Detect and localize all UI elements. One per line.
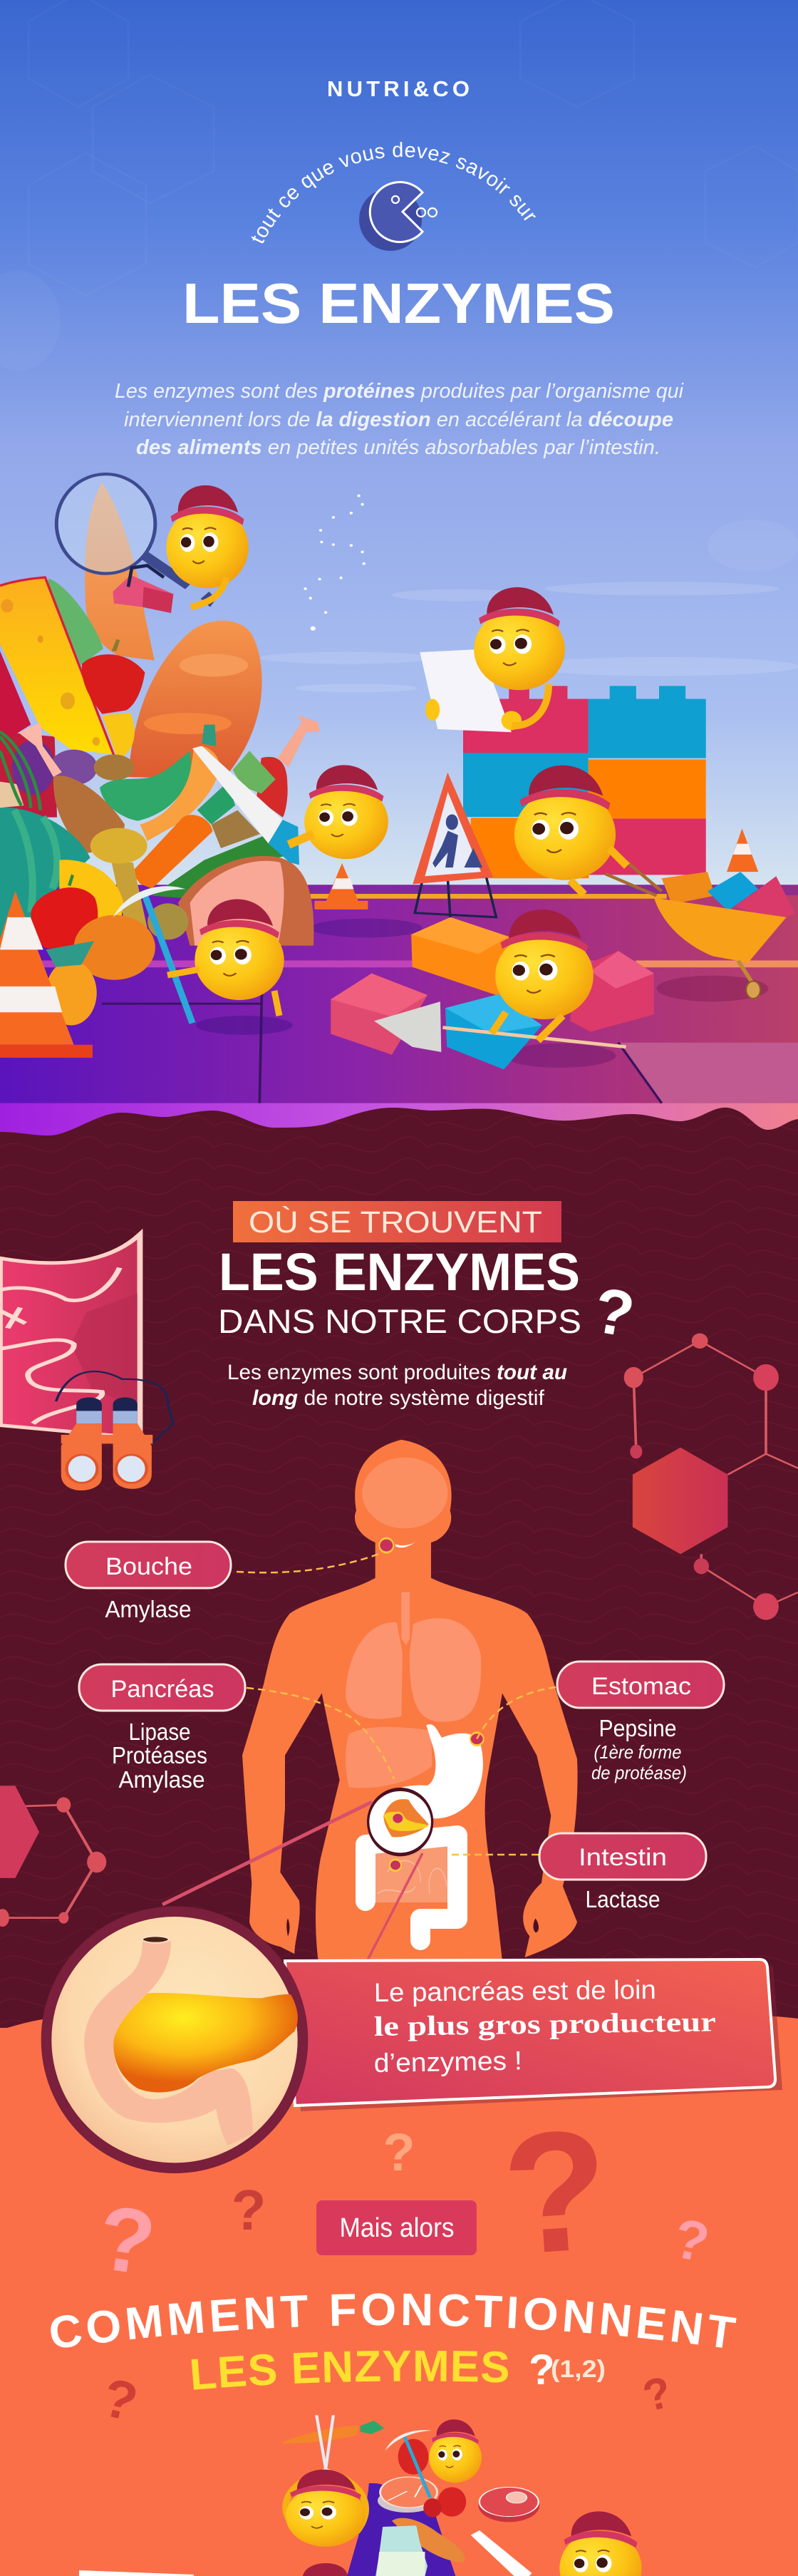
question mark: pink right: ? [668,2206,715,2274]
heading: comment fonctionnent: COMMENT FONCTIONNENT [51,2293,737,2348]
raised arms [286,2475,366,2533]
banner: où se trouvent [233,1201,561,1242]
title: Les enzymes: LES ENZYMES [182,272,615,335]
character: wheelbarrow pusher [514,766,627,895]
intro paragraph [115,380,685,459]
small intestine [373,1844,449,1902]
section paragraph [227,1361,567,1410]
molecule: left [0,1786,106,1927]
shovel [374,1001,626,1052]
character: knife holder [559,2511,642,2576]
wheelbarrow [606,861,795,999]
binoculars [56,1371,173,1490]
icon: pacman enzyme [359,182,437,251]
cutting board [347,2483,455,2576]
traffic cone: left [0,891,93,1058]
character: scissors holder [286,2470,366,2547]
label: intestin: Intestin [579,1844,667,1871]
green vegetable [152,834,287,898]
milk bottle [375,2525,428,2576]
label: pancréas: Pancréas [111,1676,214,1703]
label: estomac [557,1661,724,1783]
character: inspector with magnifier [166,485,249,607]
scissors [306,2415,346,2480]
hands detail [286,1918,539,1936]
magnifier handle and toolbox [113,551,299,865]
background: sky [0,0,798,898]
label: intestin: Lactase [586,1886,660,1912]
label: bouche: Amylase [105,1596,191,1622]
label: estomac: Pepsine [598,1715,677,1741]
yellow pepper [102,713,135,758]
logo: Nutri&Co: NUTRI&CO [327,76,470,101]
zoom lens: pancreas [46,1912,303,2168]
human body with organs [242,1440,578,1961]
section paragraph: long de notre système digestif [252,1386,545,1410]
baguette [85,483,155,661]
character: with shovel [492,910,594,1041]
lemon [59,860,123,936]
label: pancréas: Amylase [118,1766,205,1793]
filler behind leeks [0,732,57,818]
heading: dans notre corps: DANS NOTRE CORPS [218,1302,581,1340]
traffic cone: centre [314,863,368,910]
leeks [0,732,41,810]
red pepper behind [398,2439,428,2475]
heading: les enzymes yellow: LES ENZYMES [191,2351,508,2390]
callout: pancreas: le plus gros producteur [374,2006,716,2042]
chicken leg [233,715,319,818]
pickaxe [113,886,192,1023]
road sign [415,777,496,919]
heading: les enzymes yellow: (1,2) [551,2356,606,2383]
label: bouche [66,1542,231,1622]
squash and stem [140,725,260,848]
ham [178,856,314,946]
hat peek [303,2563,348,2576]
molecule: right [624,1334,798,1620]
knife [471,2530,532,2576]
label: bouche: Bouche [105,1553,192,1580]
illustration: sky details, ground and brick wall [0,495,798,1142]
carrot [132,815,212,889]
steak [478,2487,539,2522]
heading question mark: ? [589,1274,639,1351]
dashed connector lines [237,1554,556,1855]
intro paragraph: des aliments en petites unités absorbables par l’intestin. [136,436,660,459]
label: pancréas: Lipase [128,1719,191,1745]
sparkle dots [304,495,366,631]
road map sheet [420,649,522,732]
saw [192,746,299,865]
body silhouette [242,1440,578,1961]
label: estomac: Estomac [591,1673,691,1700]
heading: les enzymes: LES ENZYMES [219,1242,580,1302]
question mark: dark: ? [232,2178,266,2242]
intro paragraph: Les enzymes sont des protéines produites par l’organisme qui [115,380,685,403]
question mark: dark lower left: ? [97,2367,143,2433]
clouds [259,520,798,692]
stomach [378,1724,483,1818]
enzyme site markers [379,1538,484,1871]
baguette [392,2518,465,2562]
illustration: foreground props [0,474,795,1069]
big potato [53,776,125,853]
character: pickaxe holder [429,2419,482,2483]
label: estomac: (1ère forme [594,1741,681,1763]
dark section background [0,1108,798,2028]
question mark: small cream: ? [383,2123,415,2182]
character: sawing [289,765,388,859]
callout: pancreas: Le pancréas est de loin [374,1975,656,2007]
brick wall [463,686,706,878]
magnifying glass [56,474,155,574]
question mark: dark lower right: ? [638,2367,676,2422]
callout: pancreas: d’enzymes ! [373,2046,522,2078]
food pile [0,483,319,960]
section paragraph: Les enzymes sont produites tout au [227,1361,567,1384]
banner: où se trouvent: OÙ SE TROUVENT [249,1205,542,1240]
mushroom [90,828,147,928]
callout: pancreas [285,1959,782,2111]
illustration: enzymes cutting food [79,2415,642,2576]
bone and eggplants [12,722,98,795]
ground bricks [331,917,654,1069]
button: mais alors: Mais alors [339,2213,455,2243]
lower food [46,903,188,1025]
arched subtitle: tout ce que vous devez savoir sur [251,142,536,244]
question mark: pink left: ? [92,2186,161,2295]
label: pancréas [79,1664,245,1793]
duodenum tube [84,1939,253,2145]
zoom lens on body [368,1789,432,1855]
label: intestin [539,1833,706,1912]
character: with pickaxe [167,900,284,1016]
duct opening [142,1936,169,1943]
question mark: big: ? [497,2093,615,2291]
cucumber [100,751,191,821]
ground [0,885,798,1142]
zoom connector lines [162,1802,423,2071]
lungs [346,1592,481,1722]
large bread [128,621,261,779]
cheese [0,577,114,756]
pickaxe [385,2430,432,2498]
low tomato [31,875,98,950]
intro paragraph: interviennent lors de la digestion en accélérant la découpe [124,408,673,431]
button: mais alors [316,2200,477,2255]
green strip [48,579,103,665]
next panel corner [79,2570,194,2576]
heading: les enzymes yellow: ? [529,2346,555,2394]
orange section background [0,2016,798,2576]
traffic cone: right [727,828,758,872]
label: estomac: de protéase) [591,1762,687,1783]
pancreas [113,1993,298,2092]
tomato [82,639,145,714]
heading: les enzymes yellow [191,2346,606,2394]
bell pepper [423,2487,466,2518]
brain [362,1458,447,1528]
large intestine [366,1835,457,1940]
small potato [94,754,134,780]
watermelon [0,808,90,960]
liver [346,1727,432,1788]
label: pancréas: Protéases [112,1742,207,1768]
illustration: treasure map with binoculars [0,1235,173,1490]
salmon steak [378,2477,437,2513]
carrot [282,2421,384,2443]
character: map reader [474,587,565,726]
